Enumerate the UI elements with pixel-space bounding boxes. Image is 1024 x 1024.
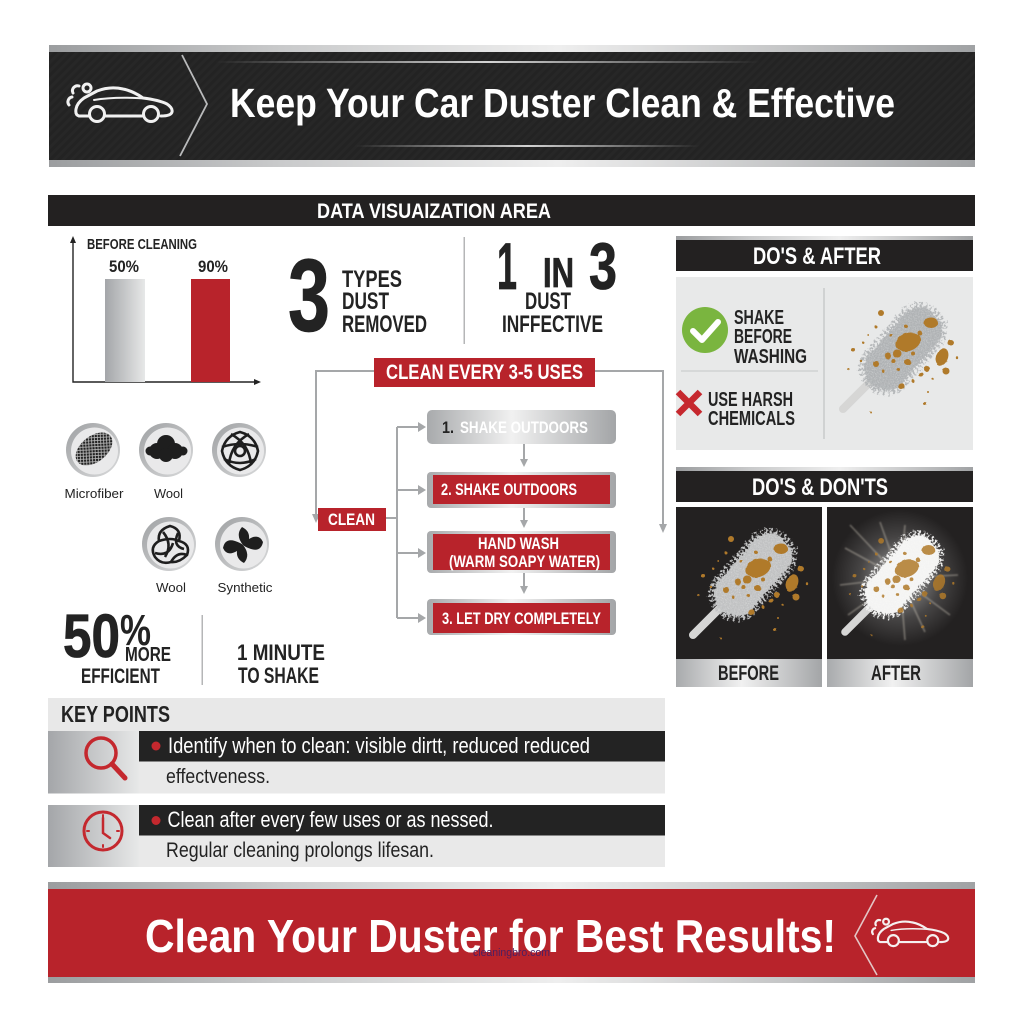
don't text: CHEMICALS [708,408,795,430]
stat: 50% more efficient: % [120,606,151,655]
bar chart: 50% [109,257,139,276]
chevron divider [855,895,877,975]
watermark: cleaningbro.com [473,947,550,959]
stat: 3 types dust removed: REMOVED [342,311,427,338]
icon: wool cloud [139,423,193,501]
bar chart [70,236,261,385]
step hand wash [427,531,616,573]
do text: SHAKE [734,307,784,329]
panel: key points [48,698,665,867]
stat: 3 types dust removed: 3 [288,238,330,353]
after card: AFTER [871,662,921,685]
box: clean: CLEAN [328,510,375,529]
stat: 1 in 3 dust ineffective: INFFECTIVE [502,311,603,338]
icon: wool cloud: Wool [154,486,183,501]
connector lines [316,371,663,618]
call to action: Clean Your Duster for Best Results! [145,910,836,962]
step hand wash: HAND WASH [478,534,559,553]
step 3 [427,599,616,635]
stat: 50% more efficient [63,602,171,688]
box: clean every 3-5 uses: CLEAN EVERY 3-5 USES [386,361,583,384]
stat: 1 in 3 dust ineffective: 3 [589,229,617,303]
image: dirty duster [843,299,958,413]
key point 2 [48,805,665,867]
before card [676,507,822,687]
icon: microfiber: Microfiber [64,486,124,501]
don't text: USE HARSH [708,389,793,411]
icon: synthetic swirl [215,517,273,595]
chevron divider [180,55,207,156]
key point 2: Clean after every few uses or as nessed. [168,807,494,832]
icon: wool knot [142,517,196,595]
stat: 1 minute to shake: TO SHAKE [238,663,319,688]
step 1: 1. [442,418,454,437]
section heading: data visualization area [48,195,975,226]
key point 1 [48,731,665,794]
stat: 50% more efficient: MORE [125,644,171,666]
material icons [64,423,273,595]
stat: 1 in 3 dust ineffective: IN [543,249,574,296]
key point 1: Identify when to clean: visible dirtt, reduced reduced [168,733,590,758]
bar chart: BEFORE CLEANING [87,237,197,253]
icon: red cross [678,392,700,414]
stat: 1 minute to shake [237,640,325,688]
icon: car with bubbles [68,84,172,122]
do text [734,307,807,368]
stat: 1 minute to shake: 1 MINUTE [237,640,325,665]
stat: 3 types dust removed: DUST [342,288,389,315]
key point 1: effectveness. [166,766,270,788]
footer banner [48,882,975,983]
stat: 1 in 3 dust ineffective: 1 [497,229,517,303]
title: Keep Your Car Duster Clean & Effective [230,80,895,126]
stat: 1 in 3 dust ineffective [497,229,617,338]
stat: 3 types dust removed [288,238,427,353]
step 1: SHAKE OUTDOORS [460,418,588,437]
panel: do's and after [676,236,973,450]
before card: BEFORE [718,662,779,685]
step 3: 3. LET DRY COMPLETELY [442,609,601,628]
do text: BEFORE [734,326,792,348]
after card [827,507,973,687]
stat: 1 in 3 dust ineffective: DUST [525,288,571,315]
icon: green check [682,307,728,353]
stat: 50% more efficient: EFFICIENT [81,665,160,688]
panel: do's and after: DO'S & AFTER [753,243,881,270]
stat: 50% more efficient: 50 [63,602,120,670]
stat: 3 types dust removed: TYPES [342,266,402,293]
step 2: 2. SHAKE OUTDOORS [441,480,577,499]
key point 2: Regular cleaning prolongs lifesan. [166,839,434,862]
panel: do's and don'ts: DO'S & DON'TS [752,474,888,501]
don't text [708,389,795,430]
step 2 [427,472,616,508]
do text: WASHING [734,346,807,368]
icon: car with bubbles [872,919,948,946]
step 1 [427,410,616,444]
header banner [49,45,975,167]
icon: synthetic swirl: Synthetic [218,580,273,595]
panel: do's and don'ts [676,467,973,687]
panel: key points: KEY POINTS [61,701,170,727]
icon: microfiber [64,423,124,501]
box: clean [318,508,386,531]
flowchart [312,358,667,635]
step hand wash: (WARM SOAPY WATER) [449,552,600,571]
icon: magnifier [86,738,125,778]
bar chart: 90% [198,257,228,276]
icon: clock [84,812,122,850]
box: clean every 3-5 uses [374,358,595,387]
icon: knot [212,423,266,477]
icon: wool knot: Wool [156,580,186,595]
section heading: data visualization area: DATA VISUAIZATION AREA [317,200,551,223]
